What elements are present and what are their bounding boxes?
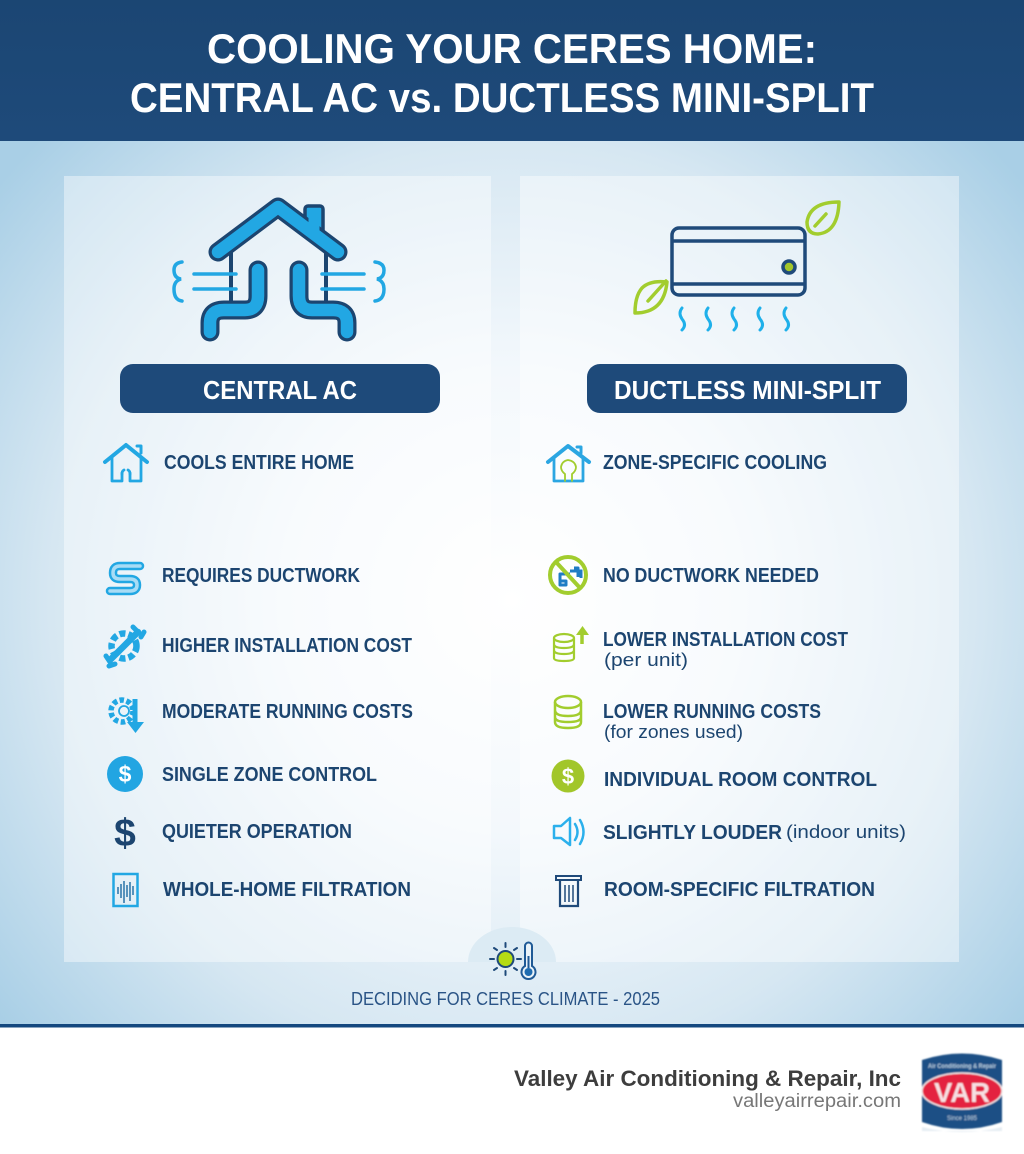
walls [231, 250, 326, 302]
text: moderate running costs: MODERATE RUNNING COSTS [162, 701, 413, 723]
icon: blue dollar coin [107, 756, 143, 792]
text: slightly louder: SLIGHTLY LOUDER [603, 822, 783, 844]
title: COOLING YOUR CERES HOME: [207, 25, 817, 72]
header band [0, 0, 1024, 141]
text: lower installation cost: (per unit) [604, 650, 688, 670]
left column features [105, 445, 413, 906]
logo: Since 1985 [947, 1116, 978, 1122]
icon: filter with waveform [114, 874, 138, 906]
panel: central AC [64, 176, 491, 962]
icon: house with ducts [174, 206, 384, 332]
air streams [174, 262, 384, 301]
icon: coin stack [555, 696, 581, 728]
label: ductless mini-split: DUCTLESS MINI-SPLIT [614, 375, 881, 405]
text: slightly louder [603, 822, 906, 844]
text: single zone control: SINGLE ZONE CONTROL [162, 764, 377, 786]
title: CENTRAL AC vs. DUCTLESS MINI-SPLIT [130, 74, 874, 121]
text: no ductwork needed: NO DUCTWORK NEEDED [603, 565, 819, 587]
label: ductless mini-split [587, 364, 907, 413]
icon: green dollar coin [552, 760, 584, 792]
caption: DECIDING FOR CERES CLIMATE - 2025 [351, 989, 660, 1009]
badge: climate icon [468, 927, 556, 979]
chimney [305, 206, 323, 234]
icon: thermometer [522, 943, 535, 979]
air waves [680, 308, 788, 330]
icon: wrench and gear [106, 627, 144, 666]
text: requires ductwork: REQUIRES DUCTWORK [162, 565, 360, 587]
company name: Valley Air Conditioning & Repair, Inc [514, 1066, 901, 1091]
logo: Air Conditioning & Repair [928, 1063, 996, 1070]
icon: speaker [554, 818, 584, 845]
icon: gear with down arrow [111, 699, 144, 733]
text: whole-home filtration: WHOLE-HOME FILTRATION [163, 879, 411, 901]
text: individual room control: INDIVIDUAL ROOM CONTROL [604, 769, 877, 791]
icon: duct pipe [110, 566, 140, 591]
label: central AC [120, 364, 440, 413]
title [130, 25, 874, 121]
icon: dollar sign: $ [114, 812, 136, 855]
text: lower running costs: (for zones used) [604, 722, 743, 742]
text: room-specific filtration: ROOM-SPECIFIC FILTRATION [604, 879, 875, 901]
text: cools entire home: COOLS ENTIRE HOME [164, 452, 354, 474]
label: central AC: CENTRAL AC [203, 375, 357, 405]
text: lower installation cost: LOWER INSTALLATION COST [603, 629, 848, 651]
panel: ductless mini-split [520, 176, 959, 962]
logo [922, 1054, 1002, 1132]
text: lower installation cost [603, 629, 848, 670]
text: zone-specific cooling: ZONE-SPECIFIC COOLING [603, 452, 827, 474]
icon: no ductwork [550, 557, 586, 593]
icon: sun [490, 943, 521, 975]
icon: blue dollar coin: $ [119, 761, 132, 787]
text: higher installation cost: HIGHER INSTALLATION COST [162, 635, 412, 657]
icon: green dollar coin: $ [562, 764, 574, 789]
icon: filter bin [556, 876, 581, 906]
leaves [635, 202, 839, 313]
icon: mini-split unit with leaves [635, 202, 839, 330]
icon: house with leaf [548, 446, 589, 481]
footer [0, 1024, 1024, 1154]
logo: VAR [934, 1077, 990, 1108]
icon: coins with up arrow [554, 626, 589, 661]
text: slightly louder: (indoor units) [786, 822, 906, 842]
roof [218, 207, 338, 252]
website: valleyairrepair.com [733, 1091, 901, 1112]
icon: house [105, 445, 147, 481]
background [0, 141, 1024, 1025]
text: lower running costs [603, 701, 821, 742]
text: quieter operation: QUIETER OPERATION [162, 821, 352, 843]
ducts [210, 270, 258, 332]
text: lower running costs: LOWER RUNNING COSTS [603, 701, 821, 723]
right column features [548, 446, 906, 906]
